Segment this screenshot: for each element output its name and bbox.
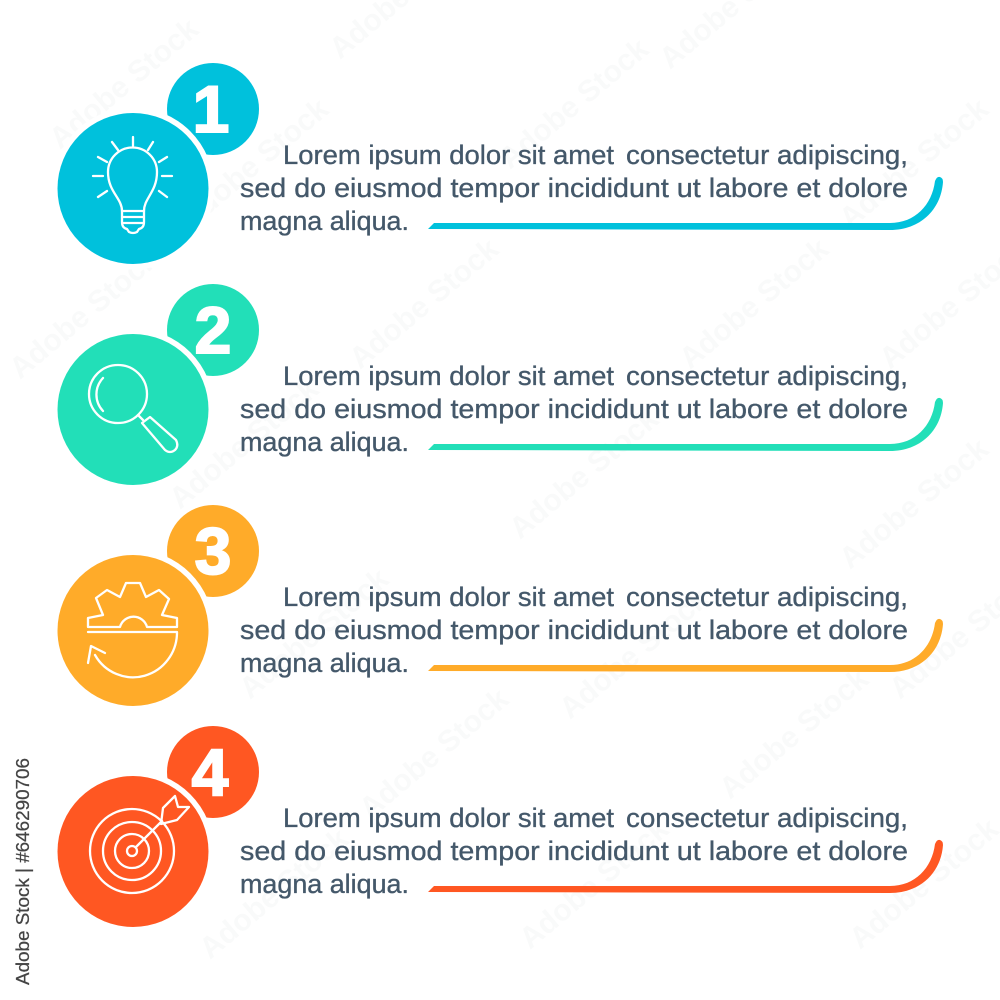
- icon: gear and helmet cycle: [88, 583, 177, 677]
- main circle 2: [52, 328, 214, 490]
- text block 3: Lorem ipsum dolor sit amet: [283, 582, 615, 612]
- underline swoosh 2: [428, 398, 943, 451]
- panel: step 1: [52, 63, 943, 270]
- text: Adobe Stock: [493, 32, 655, 175]
- text: Adobe Stock: [553, 582, 715, 725]
- text block 3: consectetur adipiscing,: [626, 582, 908, 612]
- main circle 4: [52, 770, 214, 932]
- text block 2: Lorem ipsum dolor sit amet: [283, 361, 615, 391]
- text: Adobe Stock: [713, 662, 875, 805]
- number badge 4: [167, 726, 259, 818]
- text block 2: [240, 361, 908, 457]
- panel: step 3: [52, 505, 943, 712]
- text: Adobe Stock: [673, 232, 835, 375]
- panel: step 4: [52, 726, 943, 932]
- text block 1: [240, 140, 908, 236]
- text block 2: magna aliqua.: [240, 427, 409, 457]
- text block 4: [240, 803, 908, 899]
- text: Adobe Stock: [513, 812, 675, 955]
- panel: step 2: [52, 284, 943, 490]
- text block 1: magna aliqua.: [240, 206, 409, 236]
- text block 3: magna aliqua.: [240, 648, 409, 678]
- text: Adobe Stock: [503, 402, 665, 545]
- underline swoosh 4: [428, 840, 943, 893]
- number badge 4: 4: [192, 735, 229, 809]
- icon: magnifying glass: [89, 365, 177, 452]
- text block 1: Lorem ipsum dolor sit amet: [283, 140, 615, 170]
- icon: target with arrow: [90, 796, 189, 893]
- text: Adobe Stock: [193, 822, 355, 965]
- main circle 1: [52, 108, 214, 270]
- text block 4: consectetur adipiscing,: [626, 803, 908, 833]
- text block 1: sed do eiusmod tempor incididunt ut labore et dolore: [240, 173, 908, 203]
- number badge 2: 2: [195, 293, 231, 367]
- underline swoosh 1: [428, 177, 943, 230]
- main circle 3: [52, 550, 214, 712]
- text block 4: magna aliqua.: [240, 869, 409, 899]
- text block 1: consectetur adipiscing,: [626, 140, 908, 170]
- underline swoosh 3: [428, 619, 943, 672]
- text block 2: sed do eiusmod tempor incididunt ut labore et dolore: [240, 394, 908, 424]
- text block 2: consectetur adipiscing,: [626, 361, 908, 391]
- text block 3: [240, 582, 908, 678]
- text block 4: Lorem ipsum dolor sit amet: [283, 803, 615, 833]
- text: Adobe Stock: [163, 372, 325, 515]
- number badge 3: 3: [195, 514, 231, 588]
- stock credit text: Adobe Stock | #646290706: [13, 758, 33, 985]
- text: Adobe Stock: [353, 682, 515, 825]
- text block 3: sed do eiusmod tempor incididunt ut labore et dolore: [240, 615, 908, 645]
- text: Adobe Stock: [3, 242, 165, 385]
- text: Adobe Stock: [833, 432, 995, 575]
- text: Adobe Stock: [233, 562, 395, 705]
- text block 4: sed do eiusmod tempor incididunt ut labore et dolore: [240, 836, 908, 866]
- text: Adobe Stock: [43, 12, 205, 155]
- number badge 1: [167, 63, 259, 155]
- icon: light bulb: [93, 137, 172, 233]
- number badge 2: [167, 284, 259, 376]
- text: Adobe Stock: [833, 92, 995, 235]
- text: Adobe Stock: [173, 92, 335, 235]
- text: Adobe Stock: [343, 232, 505, 375]
- number badge 1: 1: [193, 72, 229, 146]
- number badge 3: [167, 505, 259, 597]
